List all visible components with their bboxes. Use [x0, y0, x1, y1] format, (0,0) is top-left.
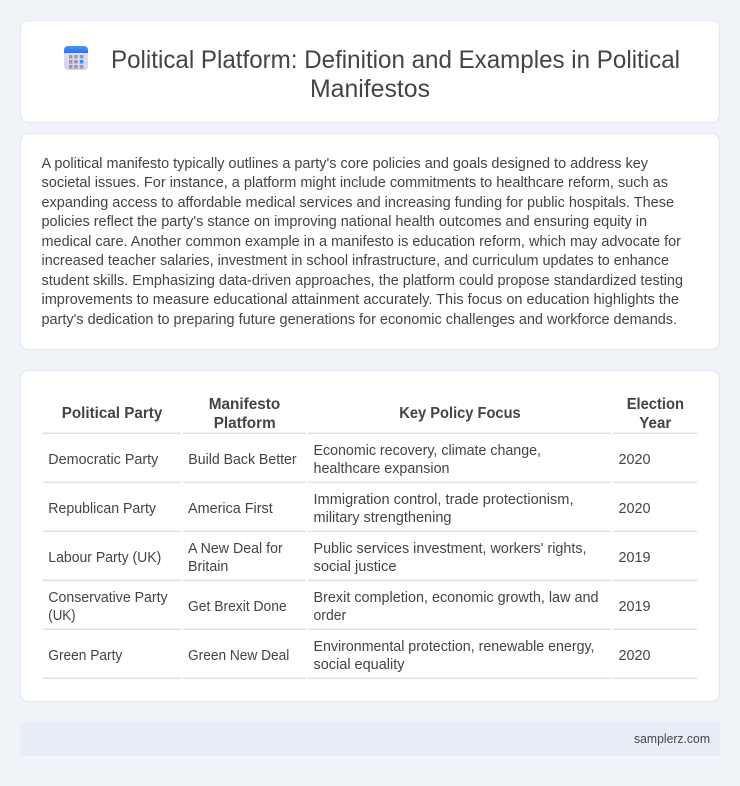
- panel: intro text: [20, 134, 720, 350]
- footer: [20, 722, 720, 756]
- row: Republican Party: America First: [188, 501, 273, 517]
- text block: manifesto description: A political manifesto typically outlines a party's core policies and goals designed to address key: [42, 156, 649, 172]
- row: Labour Party (UK): 2019: [618, 550, 650, 566]
- row: Republican Party: Immigration control, trade protectionism,: [314, 492, 574, 508]
- row: Green Party: [48, 639, 651, 673]
- table: party manifestos: [43, 396, 697, 679]
- table header row: Political Party: [62, 405, 162, 422]
- row: Labour Party (UK): A New Deal for: [188, 541, 283, 557]
- table header row: Year: [639, 415, 671, 432]
- text block: manifesto description: improvements to measure educational attainment accurately. This focus on education highlights the: [42, 292, 679, 308]
- text block: manifesto description: [42, 156, 683, 328]
- table header row: Election: [627, 396, 684, 413]
- text block: manifesto description: policies reflect the party's stance on improving national health outcomes and ensuring equity in: [42, 214, 647, 230]
- row: Labour Party (UK): Labour Party (UK): [48, 550, 161, 566]
- icon: calendar: [64, 46, 88, 70]
- text block: manifesto description: party's dedication to preparing future generations for economic challenges and workforce demands.: [42, 312, 677, 328]
- text block: manifesto description: student skills. Emphasizing data-driven approaches, the platform could propose standardized testing: [42, 273, 683, 289]
- row: Republican Party: military strengthening: [314, 510, 452, 526]
- row: Republican Party: 2020: [618, 501, 650, 517]
- row: Green Party: social equality: [314, 657, 405, 673]
- row: Conservative Party (UK): Conservative Party: [48, 590, 168, 606]
- panel: title header: [20, 20, 720, 122]
- text block: manifesto description: societal issues. For instance, a platform might include commitments to healthcare reform, such as: [42, 175, 668, 191]
- row: Labour Party (UK): social justice: [314, 559, 396, 575]
- row: Labour Party (UK): Britain: [188, 559, 228, 575]
- text block: manifesto description: medical care. Another common example in a manifesto is education reform, which may advocate for: [42, 234, 681, 250]
- row: Green Party: Green Party: [48, 648, 123, 664]
- row: Democratic Party: [48, 443, 651, 477]
- row: Conservative Party (UK): Brexit completion, economic growth, law and: [314, 590, 598, 606]
- row: Green Party: Green New Deal: [188, 648, 289, 664]
- text block: manifesto description: increased teacher salaries, investment in school infrastructure, and curriculum updates to enhance: [42, 253, 669, 269]
- title: [111, 46, 680, 103]
- row: Conservative Party (UK): Get Brexit Done: [188, 599, 287, 615]
- row: Conservative Party (UK): order: [314, 608, 346, 624]
- footer: samplerz.com: [634, 731, 710, 746]
- panel: table card: [20, 370, 720, 702]
- row: Labour Party (UK): Public services investment, workers' rights,: [314, 541, 586, 557]
- text block: manifesto description: expanding access to affordable medical services and increasing funding for public hospitals. These: [42, 195, 674, 211]
- table header row: Key Policy Focus: [399, 405, 521, 422]
- row: Republican Party: [48, 492, 651, 526]
- row: Labour Party (UK): [48, 541, 651, 575]
- table header row: Platform: [214, 415, 276, 432]
- table header row: Manifesto: [209, 396, 281, 413]
- row: Republican Party: Republican Party: [48, 501, 157, 517]
- row: Conservative Party (UK): [48, 590, 651, 624]
- row: Democratic Party: Build Back Better: [188, 452, 297, 468]
- table header row: [62, 396, 684, 432]
- row: Conservative Party (UK): (UK): [48, 608, 76, 624]
- row: Democratic Party: Democratic Party: [48, 452, 159, 468]
- row: Democratic Party: healthcare expansion: [314, 461, 450, 477]
- row: Democratic Party: 2020: [618, 452, 650, 468]
- row: Green Party: 2020: [618, 648, 650, 664]
- row: Green Party: Environmental protection, renewable energy,: [314, 639, 594, 655]
- row: Democratic Party: Economic recovery, climate change,: [314, 443, 541, 459]
- title: Manifestos: [310, 75, 430, 103]
- row: Conservative Party (UK): 2019: [618, 599, 650, 615]
- title: Political Platform: Definition and Examples in Political: [111, 46, 680, 74]
